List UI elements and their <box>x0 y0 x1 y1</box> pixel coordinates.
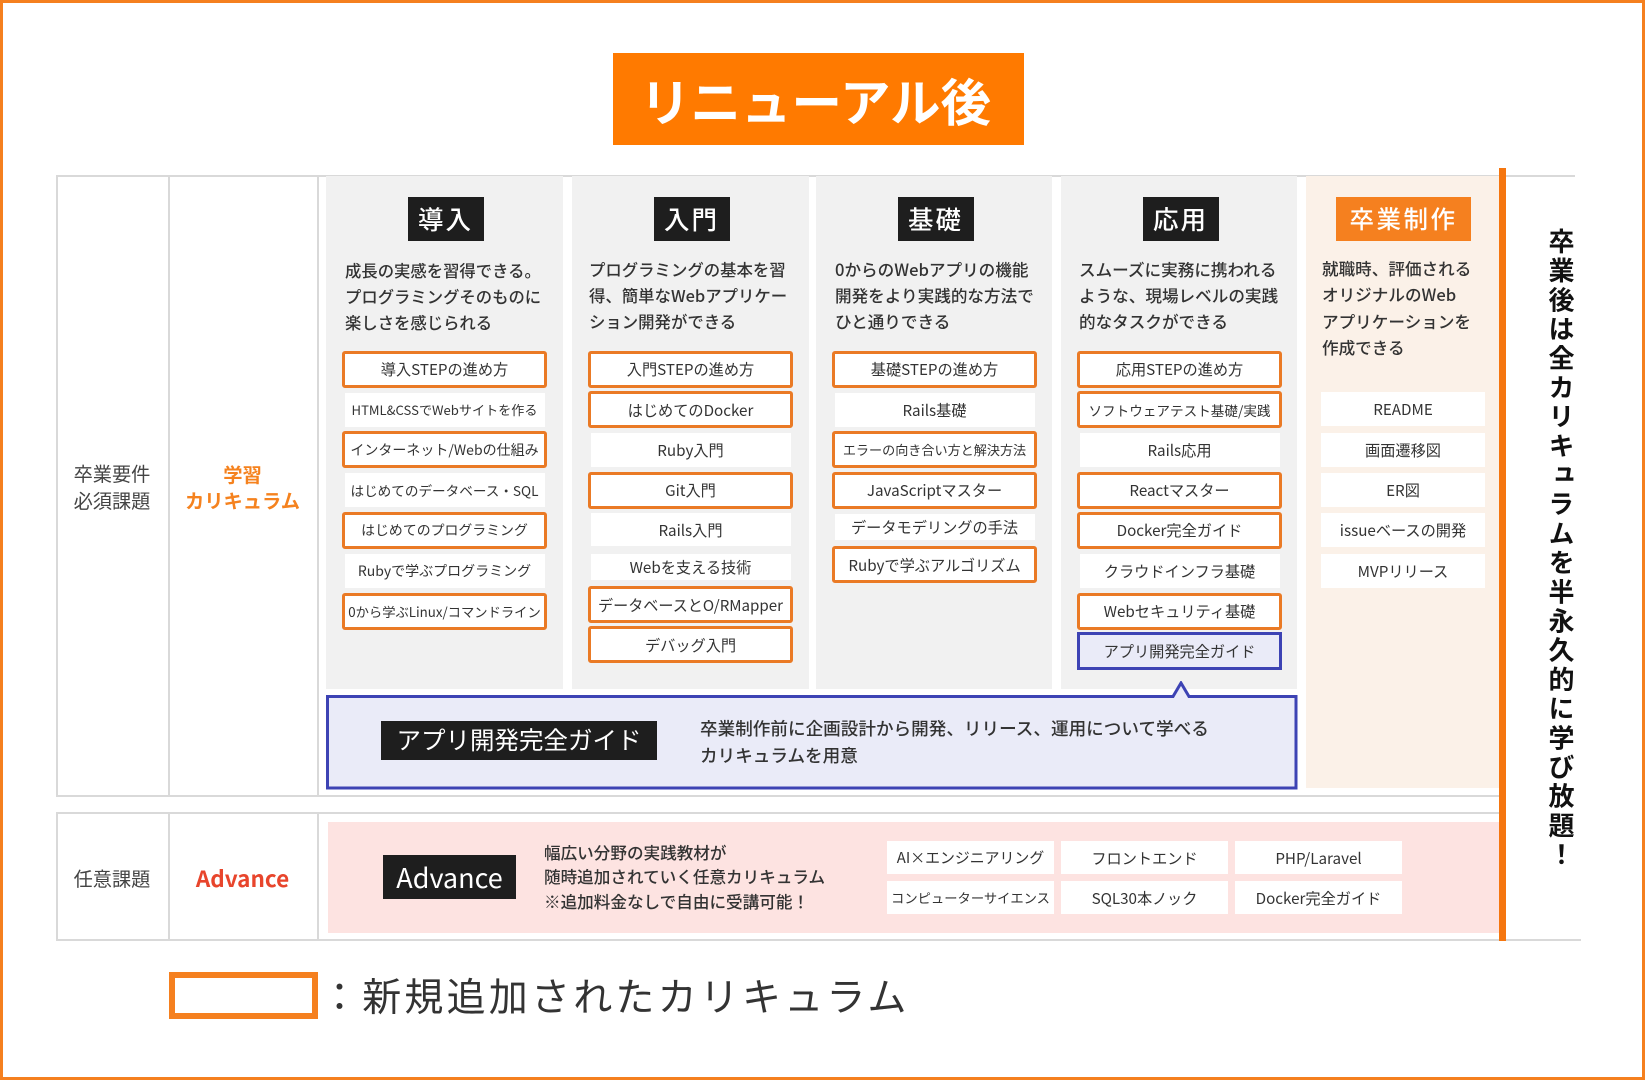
item list: はじめてのDocker <box>628 398 753 420</box>
panel: 応用: クラウドインフラ基礎 <box>1104 560 1255 582</box>
vertical orange bar <box>1499 168 1506 941</box>
panel: 導入: Rubyで学ぶプログラミング <box>358 561 531 581</box>
panel: 卒業制作: 画面遷移図 <box>1365 438 1441 460</box>
callout box <box>326 681 1298 790</box>
panel: 基礎: Rubyで学ぶアルゴリズム <box>848 554 1021 576</box>
heading: 導入: 導入 <box>418 200 473 237</box>
legend <box>169 967 910 1023</box>
row label: required tasks: 卒業要件 <box>74 459 150 487</box>
row label: learning curriculum: カリキュラム <box>185 486 300 514</box>
description: アプリケーションを <box>1322 309 1471 333</box>
row label: learning curriculum <box>185 460 300 514</box>
panel: 基礎: JavaScriptマスター <box>867 479 1002 501</box>
heading: 応用: 応用 <box>1153 200 1208 237</box>
item list: はじめてのデータベース・SQL <box>350 480 538 500</box>
description <box>345 258 541 334</box>
item list: 基礎STEPの進め方 <box>871 358 998 380</box>
description: スムーズに実務に携われる <box>1079 256 1276 280</box>
panel: 基礎 <box>816 176 1052 689</box>
description <box>589 256 787 333</box>
item list: 入門STEPの進め方 <box>627 358 754 380</box>
description: プログラミングの基本を習 <box>589 256 786 280</box>
item list: Rails応用 <box>1147 439 1212 461</box>
item list: HTML&CSSでWebサイトを作る <box>352 400 537 419</box>
description <box>544 840 825 912</box>
panel: 導入 <box>326 176 563 689</box>
heading: 応用 <box>1142 197 1218 241</box>
description <box>1079 256 1278 333</box>
panel: 入門: データベースとO/RMapper <box>598 594 783 616</box>
topic grid: SQL30本ノック <box>1092 886 1197 908</box>
callout text <box>700 716 1209 768</box>
panel: 卒業制作: README <box>1373 398 1433 420</box>
description: ション開発ができる <box>589 309 736 333</box>
description: 的なタスクができる <box>1079 309 1228 333</box>
item list <box>342 351 547 630</box>
panel: 卒業制作: issueベースの開発 <box>1340 519 1466 541</box>
item list: Ruby入門 <box>657 439 724 461</box>
topic grid: AI×エンジニアリング <box>897 847 1044 868</box>
description: 幅広い分野の実践教材が <box>544 840 727 864</box>
description: 開発をより実践的な方法で <box>835 283 1034 307</box>
row label: optional tasks: 任意課題 <box>74 864 150 892</box>
heading: 入門: 入門 <box>664 200 719 237</box>
panel: 卒業制作: ER図 <box>1386 479 1420 501</box>
heading: 卒業制作: 卒業制作 <box>1350 201 1458 236</box>
title <box>613 53 1024 145</box>
description: オリジナルのWeb <box>1322 282 1456 306</box>
panel: Advance <box>328 822 1499 933</box>
panel: 応用: アプリ開発完全ガイド <box>1104 640 1255 662</box>
item list: Rails基礎 <box>902 398 967 420</box>
heading: 導入 <box>408 197 484 241</box>
item list <box>1321 392 1485 588</box>
description: 0からのWebアプリの機能 <box>835 256 1028 280</box>
item list: ソフトウェアテスト基礎/実践 <box>1088 400 1271 420</box>
item list <box>588 351 793 663</box>
panel: 基礎: データモデリングの手法 <box>851 516 1018 538</box>
vertical message: 卒業後は全カリキュラムを半永久的に学び放題！ <box>1543 228 1580 870</box>
panel: 入門: Rails入門 <box>658 519 723 541</box>
description: 得、簡単なWebアプリケー <box>589 283 787 307</box>
panel: 導入: 0から学ぶLinux/コマンドライン <box>348 602 541 620</box>
heading: 基礎: 基礎 <box>908 200 963 237</box>
row label: required tasks <box>74 459 150 514</box>
panel: 入門: Webを支える技術 <box>630 556 751 578</box>
description <box>835 256 1034 333</box>
item list: Reactマスター <box>1129 479 1230 501</box>
item list <box>1077 351 1282 670</box>
item list: Git入門 <box>665 479 716 501</box>
callout: アプリ開発完全ガイド <box>326 681 1298 790</box>
description: ひと通りできる <box>835 309 950 333</box>
item list: 導入STEPの進め方 <box>381 358 508 380</box>
description: 成長の実感を習得できる。 <box>345 258 541 282</box>
row label: required tasks: 必須課題 <box>74 486 150 514</box>
callout heading: アプリ開発完全ガイド <box>396 722 642 757</box>
item list <box>832 351 1037 583</box>
heading: 卒業制作 <box>1336 197 1471 241</box>
item list: インターネット/Webの仕組み <box>350 440 539 460</box>
panel: 応用: Docker完全ガイド <box>1117 519 1242 541</box>
topic grid: PHP/Laravel <box>1275 846 1362 868</box>
topic grid: Docker完全ガイド <box>1256 886 1381 908</box>
description: ※追加料金なしで自由に受講可能！ <box>544 888 809 912</box>
description: 楽しさを感じられる <box>345 310 492 334</box>
description: プログラミングそのものに <box>345 284 541 308</box>
panel: 応用: Webセキュリティ基礎 <box>1104 600 1255 622</box>
heading: 入門 <box>654 197 730 241</box>
description: 随時追加されていく任意カリキュラム <box>544 864 825 888</box>
description: 就職時、評価される <box>1322 256 1471 280</box>
panel: 入門: デバッグ入門 <box>645 634 736 656</box>
topic grid <box>887 841 1402 914</box>
row label: Advance: Advance <box>196 862 289 894</box>
panel: 卒業制作: MVPリリース <box>1358 560 1448 582</box>
panel: 卒業制作 <box>1306 176 1499 788</box>
description: 作成できる <box>1322 335 1405 359</box>
title: リニューアル後 <box>640 62 991 136</box>
panel: 応用 <box>1061 176 1297 689</box>
panel: 導入: はじめてのプログラミング <box>361 520 528 540</box>
row label: learning curriculum: 学習 <box>223 460 262 488</box>
description <box>1322 256 1471 359</box>
legend text: ：新規追加されたカリキュラム <box>320 967 910 1023</box>
item list: 応用STEPの進め方 <box>1116 358 1243 380</box>
legend swatch <box>169 972 318 1019</box>
callout text: 卒業制作前に企画設計から開発、リリース、運用について学べる <box>700 716 1209 741</box>
panel: 入門 <box>572 176 809 689</box>
heading: 基礎 <box>898 197 974 241</box>
topic grid: コンピューターサイエンス <box>891 888 1050 907</box>
panel: 基礎: エラーの向き合い方と解決方法 <box>843 440 1026 459</box>
topic grid: フロントエンド <box>1091 846 1198 868</box>
callout text: カリキュラムを用意 <box>700 742 858 768</box>
heading: Advance: Advance <box>396 857 503 896</box>
description: ような、現場レベルの実践 <box>1079 283 1278 307</box>
